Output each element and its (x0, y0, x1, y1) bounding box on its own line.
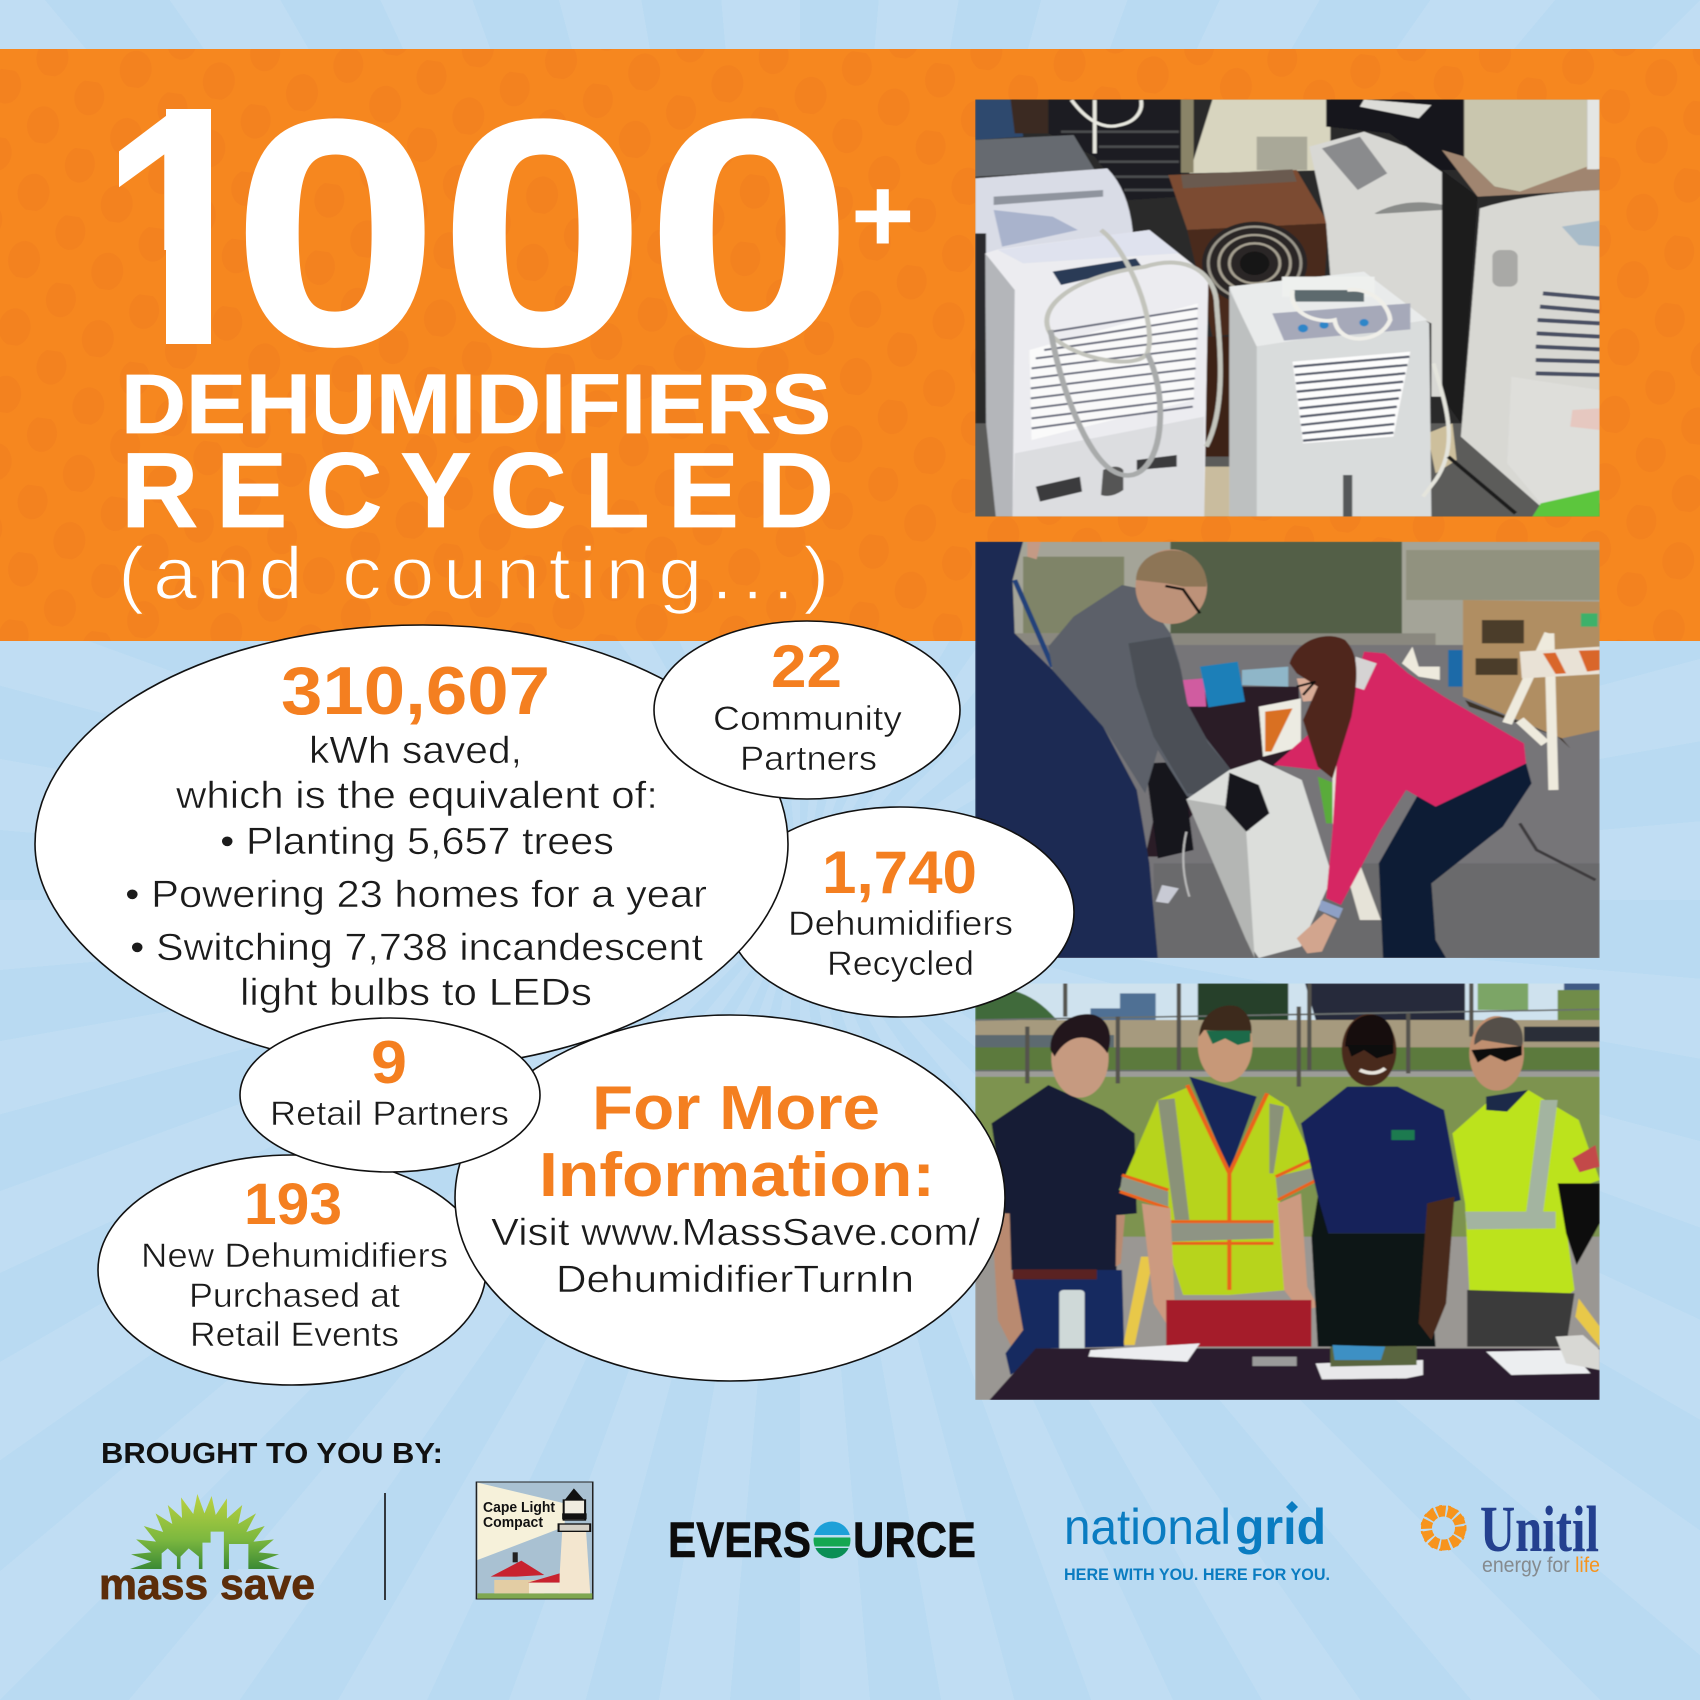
tagline: HERE WITH YOU. HERE FOR YOU. (1064, 1565, 1330, 1584)
stat label: Community (713, 700, 902, 738)
and counting: (and counting...) (118, 532, 838, 615)
website text: Visit www.MassSave.com/ (491, 1212, 980, 1254)
stat label: Retail Partners (270, 1095, 509, 1133)
logo: unitil (1422, 1493, 1600, 1577)
kWh equivalents list: kWh saved, (309, 730, 522, 772)
bubble: 1,740 dehumidifiers recycled (726, 807, 1074, 1017)
heading: For More (592, 1074, 880, 1143)
logo: eversource: URCE (853, 1512, 976, 1568)
website text: DehumidifierTurnIn (556, 1259, 914, 1301)
icon: diamond dot (1286, 1501, 1298, 1513)
logo: unitil: Unitil (1480, 1493, 1599, 1566)
logo: cape light compact: Cape Light (483, 1500, 555, 1516)
bubble: 22 community partners (654, 621, 960, 799)
kWh equivalents list: • Switching 7,738 incandescent (130, 927, 703, 969)
title: 1000+ dehumidifiers recycled (119, 109, 910, 614)
icon: eversource o (814, 1522, 850, 1558)
sponsors heading: BROUGHT TO YOU BY: (101, 1438, 443, 1470)
logo: mass save: mass save (99, 1560, 315, 1609)
bubble: 193 new dehumidifiers (98, 1155, 486, 1385)
photo: volunteers lifting a dehumidifier (975, 542, 1600, 958)
logo: cape light compact: Compact (483, 1515, 543, 1531)
kWh equivalents list: which is the equivalent of: (175, 775, 658, 817)
big number (119, 109, 839, 348)
stat label: Partners (740, 740, 877, 778)
icon: lighthouse scene (476, 1482, 593, 1599)
icon: orange pinwheel (1422, 1506, 1466, 1550)
orange title band (0, 49, 1700, 641)
stat label: Recycled (827, 945, 974, 983)
stat number 193: 193 (244, 1172, 342, 1237)
bubble: 310,607 kWh saved (35, 625, 788, 1068)
tagline: energy for life (1482, 1554, 1600, 1577)
stat number 1,740: 1,740 (822, 839, 977, 906)
recycled heading: RECYCLED (121, 430, 834, 550)
divider between mass save and cape light (384, 1493, 386, 1600)
kWh equivalents list: • Powering 23 homes for a year (125, 874, 707, 916)
stat number 9: 9 (371, 1029, 407, 1096)
bubble: 9 retail partners (240, 1018, 540, 1172)
logo: national grid (1064, 1499, 1330, 1584)
stat label: Dehumidifiers (788, 905, 1013, 943)
logo: national grid: national (1064, 1499, 1231, 1555)
icon: sunburst skyline (130, 1494, 280, 1569)
kWh equivalents list: light bulbs to LEDs (240, 972, 592, 1014)
stat number 22: 22 (771, 633, 842, 700)
digit one (119, 109, 211, 344)
dehumidifiers heading: DEHUMIDIFIERS (121, 357, 831, 451)
stat label: New Dehumidifiers (141, 1237, 448, 1275)
logo: eversource: EVERS (668, 1512, 811, 1568)
digit one: 1 (98, 43, 256, 415)
kWh equivalents list: • Planting 5,657 trees (220, 821, 614, 863)
logo: eversource (670, 1522, 975, 1558)
photo: four event staff behind a table (975, 983, 1600, 1400)
logo: cape light compact (476, 1482, 593, 1599)
logo: national grid: grıd (1235, 1499, 1326, 1555)
stat label: Retail Events (190, 1316, 399, 1354)
photo: dehumidifiers lined up (975, 99, 1600, 517)
stat label: Purchased at (189, 1277, 401, 1315)
plus sign: + (851, 155, 914, 275)
stat number 310,607: 310,607 (281, 653, 550, 729)
logo: mass save (99, 1494, 315, 1609)
bubble: for more information (455, 1015, 1005, 1381)
heading: Information: (539, 1141, 935, 1210)
three zeros: 000 (232, 54, 853, 413)
